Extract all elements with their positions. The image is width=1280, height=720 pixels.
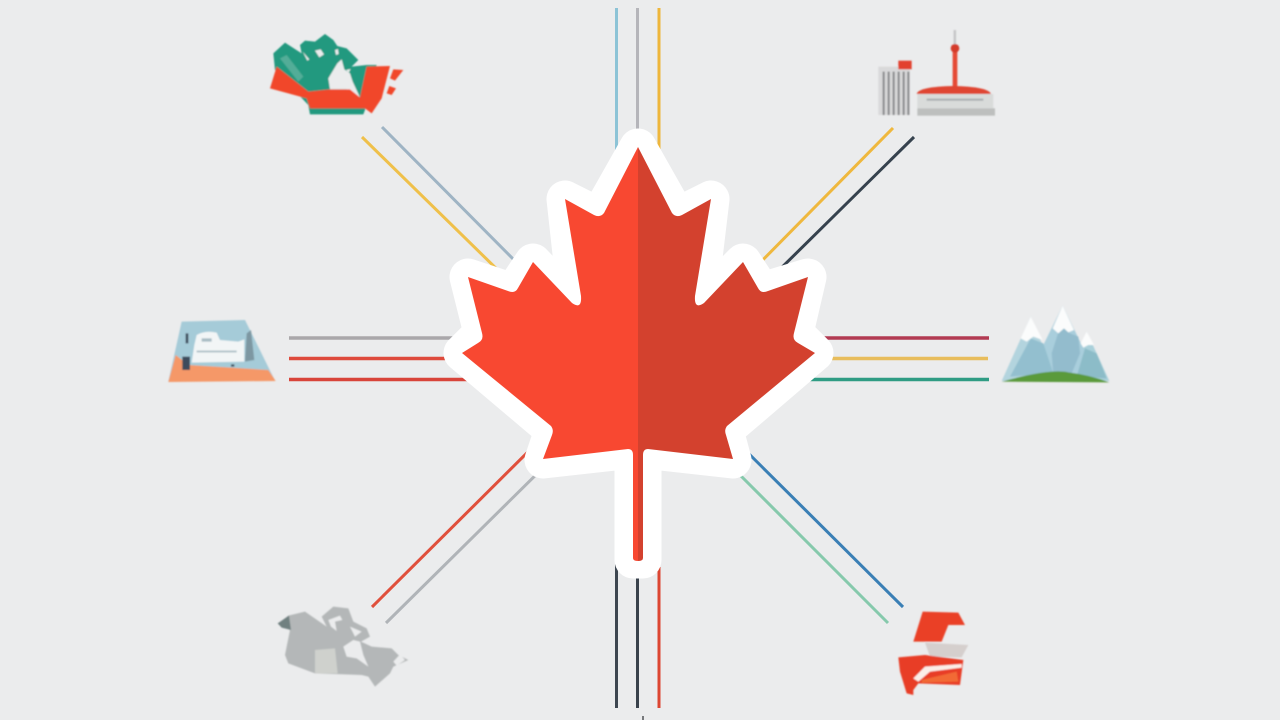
- building windows: [197, 338, 237, 352]
- connector lines: bottom: [616, 546, 659, 708]
- ribbon bottom: [898, 655, 963, 695]
- connector lines: left: [289, 338, 480, 380]
- connector lines: lower left: [372, 435, 555, 623]
- leaf left half: [462, 147, 638, 561]
- leaf right half: [638, 147, 815, 561]
- figures: [182, 333, 234, 370]
- grey fold: [925, 643, 968, 657]
- sky panel: [168, 320, 275, 382]
- connector lines: top: [616, 8, 659, 150]
- icon: red ribbon: [898, 612, 968, 695]
- dark yukon: [278, 616, 291, 630]
- red rooftop block: [898, 61, 912, 69]
- connector lines: upper right: [745, 128, 914, 284]
- small bottom tick: [642, 716, 644, 720]
- hudson bay: [328, 59, 360, 97]
- red roof: [917, 86, 991, 94]
- icon: grey canada map: [278, 607, 408, 687]
- right shaded facet: [1077, 348, 1107, 378]
- map red band: [270, 66, 390, 113]
- arctic gaps: [328, 616, 405, 666]
- orange ground: [168, 355, 276, 382]
- icon: building on orange ground: [168, 320, 276, 382]
- stadium upper: [917, 94, 993, 108]
- icon: snowy mountains: [1002, 306, 1109, 382]
- pale prairie: [315, 648, 338, 673]
- ribbon top: [913, 612, 965, 642]
- right peak: [1070, 332, 1109, 381]
- stadium detail: [927, 99, 983, 101]
- map landmass green: [273, 34, 377, 114]
- icon: canada map green and red: [270, 34, 403, 114]
- lighter green territory: [280, 55, 303, 82]
- snow caps: [1021, 306, 1094, 348]
- tower antenna: [954, 30, 956, 47]
- map landmass grey: [278, 607, 408, 687]
- arctic gaps: [303, 49, 351, 73]
- connector lines: upper left: [362, 127, 530, 282]
- ribbon orange fold: [922, 672, 958, 683]
- maple leaf: [462, 147, 815, 561]
- connector lines: lower right: [722, 437, 903, 623]
- dark tower: [245, 330, 254, 362]
- centre shaded facet: [1052, 328, 1080, 373]
- left shaded facet: [1010, 338, 1053, 377]
- hudson bay: [343, 640, 368, 667]
- map red islands: [387, 69, 403, 95]
- icon: city tower and buildings: [878, 30, 995, 116]
- centre peak: [1043, 306, 1087, 375]
- ribbon highlight: [913, 664, 962, 682]
- white building: [192, 332, 244, 363]
- office building stripes: [883, 72, 909, 115]
- connector lines: right: [800, 338, 989, 380]
- tower pod: [951, 44, 959, 53]
- green hill: [1002, 371, 1109, 382]
- leaf white outline: [462, 147, 815, 560]
- stadium lower: [917, 108, 995, 116]
- tower mast: [953, 50, 957, 89]
- left peak: [1002, 317, 1055, 381]
- office building: [878, 67, 910, 115]
